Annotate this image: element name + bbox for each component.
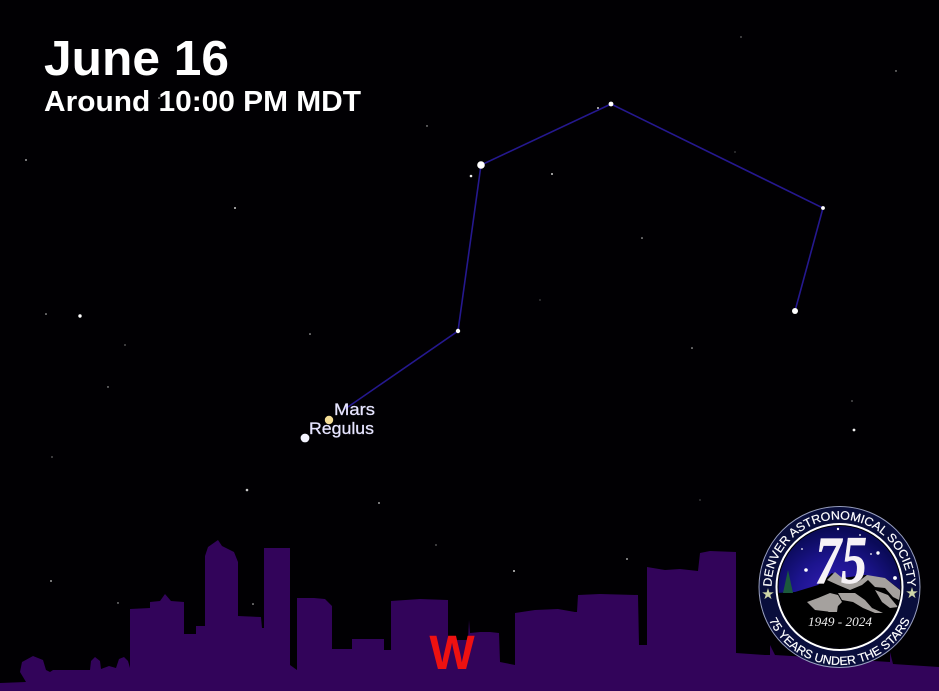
logo dates: 1949 - 2024 [808, 614, 872, 629]
star: Regulus: Regulus [309, 419, 374, 438]
logo number 75: 75 [815, 522, 867, 598]
compass direction W: W [429, 627, 475, 680]
logo: Denver Astronomical Society badge [758, 506, 920, 668]
logo ring stars [761, 584, 919, 603]
logo ring text top: DENVER ASTRONOMICAL SOCIETY [763, 511, 916, 586]
logo inner scene [778, 526, 900, 648]
logo ring stars: ★ [905, 584, 919, 602]
star: Regulus [301, 419, 374, 442]
title: June 16 [44, 32, 229, 86]
constellation lines: Leo [345, 104, 823, 409]
logo ring text bottom: 75 YEARS UNDER THE STARS [770, 616, 910, 666]
background stars [25, 36, 897, 605]
constellation stars [456, 102, 825, 333]
city skyline [0, 540, 939, 691]
logo ring stars: ★ [761, 585, 775, 603]
subtitle: Around 10:00 PM MDT [44, 86, 362, 118]
planet: Mars [325, 400, 375, 424]
planet: Mars: Mars [334, 400, 375, 419]
